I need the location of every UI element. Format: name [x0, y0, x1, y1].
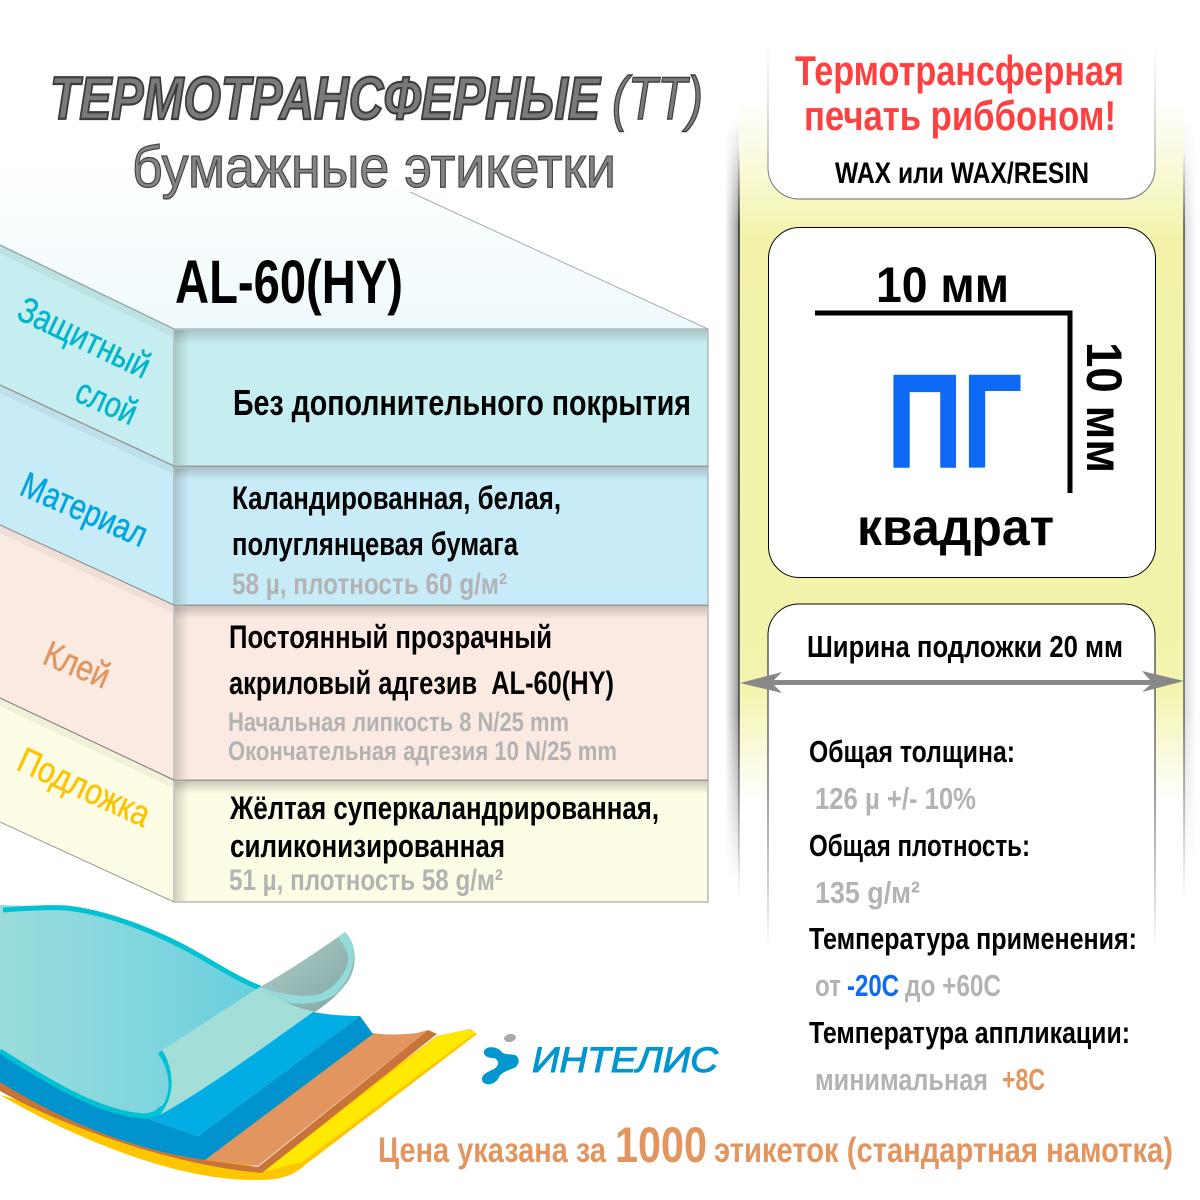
illustration: peeled label layers — [0, 905, 477, 1180]
subtitle: бумажные этикетки — [132, 135, 616, 200]
label roll strip — [726, 115, 1193, 894]
panel: material front — [174, 467, 708, 605]
title: ТЕРМОТРАНСФЕРНЫЕ — [50, 65, 602, 132]
adhesive text: Постоянный прозрачный — [229, 619, 552, 655]
price note — [378, 1117, 1173, 1173]
red heading: печать риббоном! — [804, 92, 1116, 139]
top face right edge — [410, 192, 708, 329]
side label: material: Материал — [15, 464, 154, 555]
product code: AL-60(HY) — [175, 248, 403, 316]
film main surface — [0, 905, 260, 1117]
panel: label dimensions — [768, 228, 1156, 578]
film top edge — [3, 908, 260, 988]
side label: adhesive: Клей — [38, 633, 116, 696]
film lower edge — [0, 1051, 171, 1116]
panel: adhesive side face — [0, 525, 174, 780]
panel: backing side face — [0, 698, 174, 902]
side label: protective layer — [12, 288, 157, 433]
translucent peeled fold — [160, 987, 313, 1115]
spec: total density — [809, 828, 1030, 910]
backing width text: Ширина подложки 20 мм — [807, 629, 1123, 664]
spec: total thickness: Общая толщина: — [809, 734, 1015, 769]
panel: specifications label — [740, 604, 1184, 1097]
protective layer text: Без дополнительного покрытия — [233, 382, 691, 423]
red heading — [795, 47, 1124, 139]
material text: 58 µ, плотность 60 g/м² — [232, 568, 507, 601]
spec: application temperature: Температура аппликации: — [809, 1015, 1130, 1050]
paper top — [143, 1012, 360, 1136]
shape caption: квадрат — [857, 499, 1054, 557]
panel: backing front — [174, 781, 708, 902]
yellow backing top — [263, 1030, 475, 1172]
panel: protective layer front — [174, 329, 708, 466]
logo mark — [482, 1033, 519, 1084]
spec: total density: Общая плотность: — [809, 828, 1030, 863]
spec: total thickness — [809, 734, 1015, 816]
price note: 1000 — [615, 1117, 707, 1173]
spec: service temperature: до +60С — [905, 968, 1001, 1003]
height dimension text: 10 мм — [1076, 342, 1132, 473]
panel: protective layer side face — [0, 245, 174, 466]
adhesive text: Начальная липкость 8 N/25 mm — [228, 707, 569, 737]
dimension corner lines — [815, 313, 1070, 493]
spec: application temperature: +8С — [1002, 1062, 1045, 1097]
price note: Цена указана за — [378, 1131, 606, 1170]
logo wordmark: ИНТЕЛИС — [532, 1041, 719, 1080]
title: (ТТ) — [612, 65, 703, 132]
logo — [482, 1033, 719, 1084]
spec: total density: 135 g/м² — [815, 875, 920, 910]
adhesive text: акриловый адгезив AL-60(HY) — [229, 665, 614, 701]
spec: service temperature: от — [815, 968, 841, 1003]
winding symbol: ПГ — [887, 348, 1022, 496]
backing text — [229, 790, 659, 897]
spec: total thickness: 126 µ +/- 10% — [815, 781, 976, 816]
backing text: Жёлтая суперкаландрированная, — [229, 790, 659, 826]
side label: protective layer: слой — [70, 370, 144, 433]
arrow: backing width — [740, 671, 1184, 693]
panel: adhesive front — [174, 606, 708, 780]
spec: application temperature — [809, 1015, 1130, 1097]
panel: ribbon printing label — [768, 0, 1155, 199]
adhesive text — [228, 619, 617, 766]
curled film rim — [260, 932, 354, 1004]
curled film underside — [260, 932, 355, 1012]
material text: полуглянцевая бумага — [232, 526, 518, 562]
spec: service temperature — [809, 921, 1137, 1003]
backing text: силиконизированная — [230, 828, 505, 864]
width dimension text: 10 мм — [876, 257, 1009, 313]
spec: application temperature: минимальная — [815, 1062, 988, 1097]
top face of the layer stack — [0, 157, 708, 329]
paper edge — [0, 1016, 373, 1160]
spec: service temperature: -20С — [847, 968, 899, 1003]
gold backing layer — [0, 1029, 477, 1180]
backing text: 51 µ, плотность 58 g/м² — [229, 864, 503, 897]
side label: protective layer: Защитный — [12, 288, 157, 386]
material text: Каландированная, белая, — [232, 480, 561, 516]
ribbon type: WAX или WAX/RESIN — [835, 157, 1089, 190]
red heading: Термотрансферная — [795, 47, 1124, 94]
panel: material side face — [0, 385, 174, 605]
adhesive text: Окончательная адгезия 10 N/25 mm — [228, 736, 617, 766]
side label: backing: Подложка — [12, 739, 158, 835]
adhesive edge — [0, 1030, 437, 1173]
material text — [232, 480, 561, 601]
adhesive top — [205, 1030, 428, 1166]
